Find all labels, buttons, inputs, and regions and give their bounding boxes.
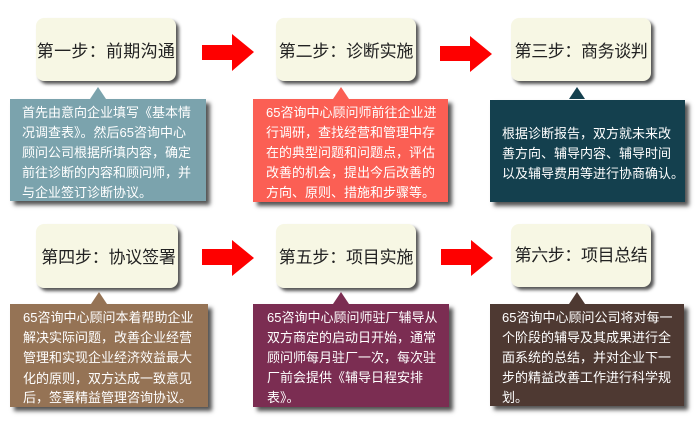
step 5 description callout — [253, 304, 449, 407]
step 3 title: 第三步：商务谈判 — [515, 42, 647, 61]
step 4 description callout — [10, 304, 208, 407]
step 5 description callout: 65咨询中心顾问师驻厂辅导从 — [267, 310, 437, 325]
step 6 description callout: 步的精益改善工作进行科学规 — [502, 370, 671, 385]
step 1 description callout: 首先由意向企业填写《基本情 — [22, 105, 191, 120]
step 6 description callout: 面系统的总结，并对企业下一 — [502, 350, 671, 365]
step 1 description callout: 顾问公司根据所填内容，确定 — [22, 145, 191, 160]
arrow: step 2 to step 3 — [440, 36, 492, 72]
step 4 description callout: 管理和实现企业经济效益最大 — [23, 350, 192, 365]
step 2 title — [276, 18, 416, 81]
step 6 description callout: 划。 — [502, 390, 528, 405]
step 6 description callout — [490, 304, 684, 406]
step 6 description callout: 个阶段的辅导及其成果进行全 — [502, 330, 671, 345]
step 5 title: 第五步：项目实施 — [279, 248, 413, 267]
step 5 description callout: 表》。 — [267, 390, 300, 405]
step 1 description callout: 况调查表》。然后65咨询中心 — [22, 125, 186, 140]
step 1 title: 第一步：前期沟通 — [37, 42, 175, 61]
step 3 title — [511, 18, 651, 81]
step 4 description callout: 解决实际问题，改善企业经营 — [23, 330, 192, 345]
step 1 description callout: 与企业签订诊断协议。 — [22, 185, 152, 200]
step 4 description callout: 化的原则，双方达成一致意见 — [23, 371, 192, 386]
step 1 description callout — [10, 99, 206, 201]
step 5 description callout: 厂前会提供《辅导日程安排 — [267, 370, 423, 385]
step 2 description callout: 方向、原则、措施和步骤等。 — [266, 185, 435, 200]
step 5 description callout: 双方商定的启动日开始，通常 — [267, 330, 436, 345]
step 4 title — [36, 224, 178, 288]
step 6 title — [511, 224, 651, 287]
step 3 description callout: 根据诊断报告，双方就未来改 — [502, 126, 671, 141]
step 1 title — [36, 18, 176, 81]
step 6 title: 第六步：项目总结 — [515, 246, 647, 265]
step 4 description callout: 后，签署精益管理咨询协议。 — [23, 390, 192, 405]
step 2 description callout: 在的典型问题和问题点，评估 — [266, 145, 435, 160]
step 5 description callout: 顾问师每月驻厂一次，每次驻 — [267, 350, 436, 365]
arrow: step 1 to step 2 — [202, 34, 254, 71]
step 2 title: 第二步：诊断实施 — [279, 42, 413, 61]
step 2 description callout — [253, 99, 448, 202]
step 2 description callout: 改善的机会，提出今后改善的 — [266, 165, 435, 180]
step 3 description callout — [490, 100, 685, 202]
step 5 title — [276, 224, 416, 288]
step 3 description callout: 善方向、辅导内容、辅导时间 — [502, 146, 671, 161]
arrow: step 4 to step 5 — [202, 240, 254, 276]
step 1 description callout: 前往诊断的内容和顾问师，并 — [22, 165, 191, 180]
step 6 description callout: 65咨询中心顾问公司将对每一 — [502, 310, 672, 325]
step 4 title: 第四步：协议签署 — [41, 248, 176, 267]
step 4 description callout: 65咨询中心顾问本着帮助企业 — [23, 310, 193, 325]
step 2 description callout: 65咨询中心顾问师前往企业进 — [266, 105, 436, 120]
arrow: step 5 to step 6 — [441, 240, 493, 276]
step 2 description callout: 行调研，查找经营和管理中存 — [266, 125, 435, 140]
step 3 description callout: 以及辅导费用等进行协商确认。 — [502, 166, 684, 181]
